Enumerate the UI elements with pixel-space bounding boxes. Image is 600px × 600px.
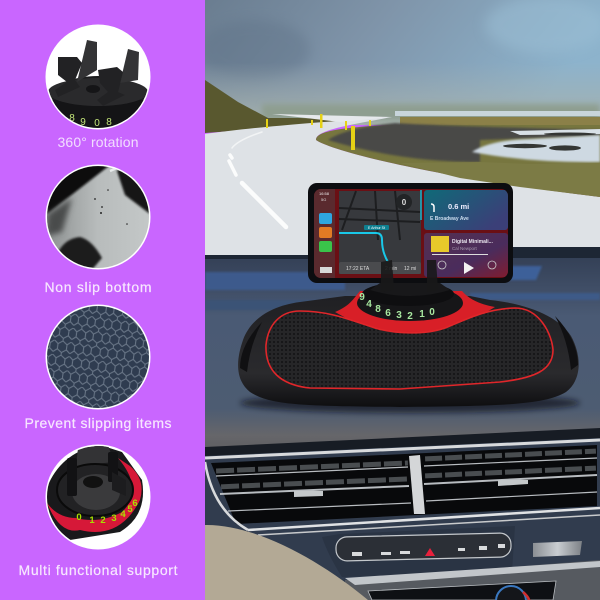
icon: multi functional base photo: 6 bbox=[132, 498, 138, 509]
dashboard blue air vent strips bbox=[205, 266, 600, 310]
parking number dial: 9 bbox=[359, 292, 365, 303]
parking number dial: 6 bbox=[385, 308, 391, 319]
air vents bbox=[205, 440, 600, 535]
beige seat bbox=[205, 525, 368, 600]
mountain slope bbox=[200, 0, 600, 125]
phone mat bbox=[238, 291, 580, 413]
icon: hexagon grip texture photo bbox=[46, 304, 150, 410]
navigation map: 17:22 ETA bbox=[346, 266, 370, 272]
direction tile bbox=[421, 190, 508, 230]
parking number dial bbox=[357, 282, 463, 322]
phone bbox=[308, 183, 513, 283]
dashboard bbox=[205, 255, 600, 460]
green grass band below water bbox=[436, 162, 600, 197]
icon: multi functional base photo: 0 bbox=[76, 512, 82, 523]
parking number dial: 8 bbox=[375, 304, 381, 315]
panel: purple feature sidebar bbox=[0, 0, 205, 600]
parking number dial: 3 bbox=[396, 310, 402, 321]
dark band above vents bbox=[205, 428, 600, 458]
panel: windshield road scene bbox=[200, 0, 600, 600]
icon: 360 rotation mount photo: 8 bbox=[106, 117, 112, 128]
icon: multi functional base photo: 3 bbox=[111, 513, 117, 524]
music tile: Cal Newport bbox=[452, 246, 478, 251]
icon: 360 rotation mount photo bbox=[46, 24, 150, 130]
direction tile: 0.6 mi bbox=[448, 202, 469, 211]
distant green flats and water bbox=[262, 104, 600, 120]
shore land bbox=[400, 117, 600, 125]
text: non slip bottom label: Non slip bottom bbox=[44, 279, 152, 295]
icon: multi functional base photo bbox=[46, 444, 150, 550]
mat black body bbox=[238, 296, 579, 407]
rubber side caps bbox=[240, 316, 578, 372]
icon: non slip bottom photo bbox=[46, 164, 150, 272]
silver door handle switch bbox=[533, 541, 582, 557]
music tile bbox=[424, 233, 508, 277]
left hillside bbox=[205, 80, 335, 133]
navigation map bbox=[339, 191, 421, 274]
far road strip bbox=[272, 114, 392, 122]
direction tile: E Broadway Ave bbox=[430, 216, 469, 222]
parking number dial: 1 bbox=[419, 309, 425, 320]
text: 360 rotation label: 360° rotation bbox=[58, 134, 138, 150]
icon: 360 rotation mount photo: 8 bbox=[69, 113, 75, 124]
lower dash fascia bbox=[205, 438, 600, 582]
navigation map: 12 mi bbox=[404, 266, 416, 272]
icon: multi functional base photo: 2 bbox=[100, 515, 106, 526]
sidebar: 16:58 bbox=[319, 191, 330, 196]
icon: multi functional base photo: 5 bbox=[127, 504, 133, 515]
tidal water bbox=[472, 129, 600, 162]
icon: 360 rotation mount photo: 0 bbox=[94, 118, 100, 129]
white road bbox=[205, 117, 600, 258]
navigation map: E Arthur St bbox=[368, 226, 385, 230]
icon: 360 rotation mount photo: 9 bbox=[80, 117, 86, 128]
parking number dial: 2 bbox=[407, 311, 413, 322]
icon: multi functional base photo: 1 bbox=[89, 515, 95, 526]
parking number dial: 0 bbox=[429, 307, 435, 318]
parking number dial: 4 bbox=[366, 299, 372, 310]
hazard button cluster bbox=[322, 526, 515, 577]
sidebar bbox=[314, 189, 335, 278]
sidebar: 5G bbox=[321, 197, 326, 202]
icon: multi functional base photo: 4 bbox=[120, 509, 126, 520]
non slip pad with red border bbox=[266, 308, 553, 389]
music tile: Digital Minimali... bbox=[452, 239, 493, 245]
road centre dashes bbox=[229, 132, 286, 227]
text: multi functional support label: Multi functional support bbox=[18, 562, 178, 578]
centre console bbox=[345, 560, 600, 600]
phone holder clips and stem bbox=[370, 260, 450, 296]
mat shadow bbox=[240, 393, 580, 413]
dashboard top shadow bbox=[205, 247, 600, 259]
rocky shore bbox=[328, 123, 600, 162]
grassy roadside verge bbox=[316, 125, 600, 197]
navigation map: 0 bbox=[402, 198, 407, 207]
text: prevent slipping items label: Prevent slipping items bbox=[24, 415, 172, 431]
red raised collar bbox=[335, 291, 495, 334]
navigation map: 2 min bbox=[385, 266, 397, 272]
yellow road markers bbox=[266, 114, 371, 150]
